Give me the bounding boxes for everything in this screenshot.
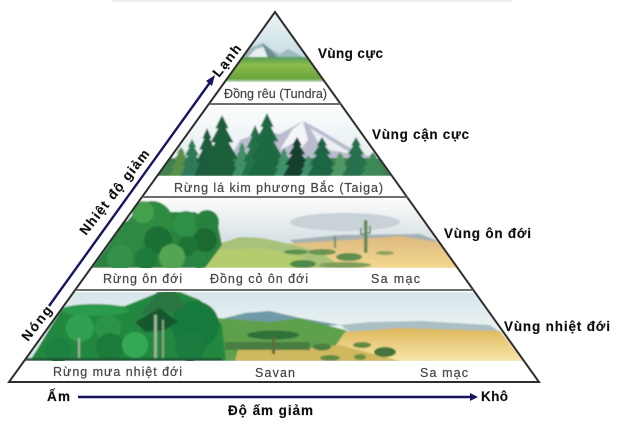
zone labels: Vùng cực — [318, 46, 383, 61]
biome labels: Savan — [255, 366, 295, 380]
arrow: humidity axis: Khô — [481, 389, 508, 404]
biome labels: Sa mạc — [371, 272, 420, 286]
scene: taiga forest — [158, 112, 391, 176]
arrow: humidity axis: Ấm — [47, 389, 70, 404]
biome labels: Rừng mưa nhiệt đới — [53, 365, 182, 379]
arrow: temperature axis: Lạnh — [210, 41, 244, 80]
biome labels: Đồng cỏ ôn đới — [210, 272, 308, 286]
biome labels: Rừng lá kim phương Bắc (Taiga) — [174, 180, 383, 195]
arrow: humidity axis — [47, 389, 508, 418]
scene: temperate forest, grassland and desert — [84, 199, 465, 271]
arrow: temperature axis — [19, 41, 244, 344]
zone labels: Vùng nhiệt đới — [504, 319, 610, 334]
pyramid outline and dividers — [9, 12, 539, 382]
arrow: humidity axis: Độ ấm giảm — [228, 403, 313, 418]
zone labels — [318, 46, 610, 334]
zone labels: Vùng cận cực — [372, 127, 469, 142]
scene: tropical rainforest, savanna and desert — [22, 290, 526, 363]
biome labels: Đồng rêu (Tundra) — [224, 87, 327, 101]
scene: tundra — [226, 14, 324, 82]
faint title remnant — [112, 0, 512, 2]
arrow: temperature axis: Nhiệt độ giảm — [77, 147, 152, 238]
biome labels — [53, 87, 468, 380]
biome labels: Sa mạc — [420, 366, 468, 380]
zone labels: Vùng ôn đới — [444, 226, 531, 241]
biome labels: Rừng ôn đới — [103, 272, 182, 286]
arrow: temperature axis: Nóng — [19, 303, 55, 344]
